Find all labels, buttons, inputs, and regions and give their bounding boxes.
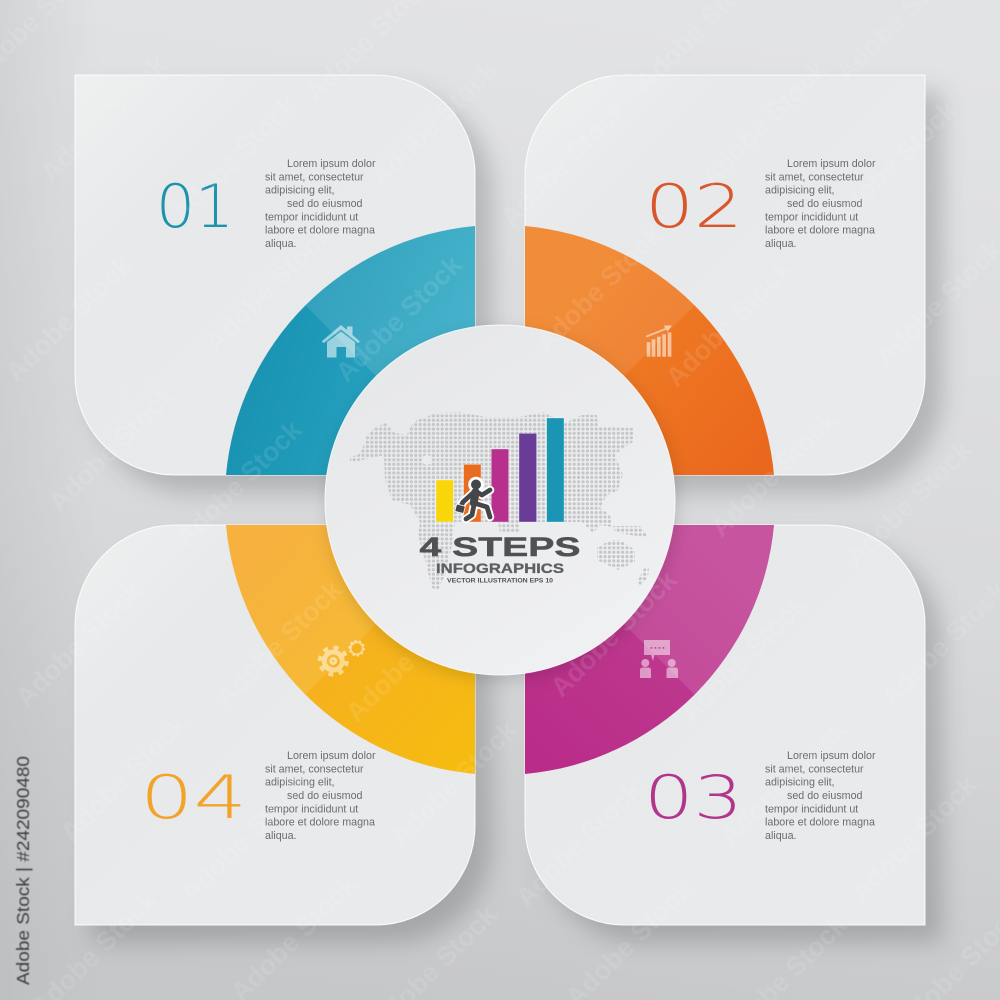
number 02: 02 [645,172,743,242]
watermark: Adobe Stock repeated: Adobe Stock [10,574,148,713]
text block 03: sed do eiusmod [787,790,863,802]
panel: step 01 [75,75,475,475]
icon: rising bar chart [646,326,672,357]
watermark: Adobe Stock repeated: Adobe Stock [330,249,468,388]
watermark: Adobe Stock repeated: Adobe Stock [840,434,978,573]
panel: step 02 [525,75,925,475]
watermark: Adobe Stock repeated: Adobe Stock [705,404,843,543]
icon: home [322,325,360,358]
text block 04: tempor incididunt ut [265,803,358,815]
watermark: Adobe Stock repeated: Adobe Stock [385,714,523,853]
watermark: Adobe Stock repeated: Adobe Stock [0,249,138,388]
text block 03: adipisicing elit, [765,777,835,789]
watermark: Adobe Stock repeated: Adobe Stock [715,714,853,853]
text block 04: sed do eiusmod [287,790,363,802]
watermark: Adobe Stock repeated: Adobe Stock [165,89,303,228]
vertical stock credit: Adobe Stock | #242090480 [13,756,33,985]
arc sheen 02 [525,226,694,475]
text block 02: tempor incididunt ut [765,211,858,223]
icon: people talking [640,640,678,678]
card 01 [75,75,475,475]
arc band 03 [525,525,774,774]
watermark: Adobe Stock repeated: Adobe Stock [495,94,633,233]
watermark: Adobe Stock repeated: Adobe Stock [675,589,813,728]
panel: step 03 [525,525,925,925]
arc band 04 [226,525,475,774]
bar chart [436,418,564,522]
arc sheen 04 [226,525,475,694]
number 04: 04 [140,763,247,833]
title: 4 STEPS: 4 STEPS [420,532,580,562]
text block 04: labore et dolore magna [265,817,375,829]
text block 02: aliqua. [765,238,796,250]
text block 04: aliqua. [265,830,296,842]
watermark: Adobe Stock repeated: Adobe Stock [510,774,648,913]
watermark: Adobe Stock repeated: Adobe Stock [695,54,833,193]
watermark: Adobe Stock repeated: Adobe Stock [660,254,798,393]
watermark: Adobe Stock repeated: Adobe Stock [55,709,193,848]
arc band 01 [226,226,475,475]
icon: running businessman [455,480,490,519]
arc band 02 [525,226,774,475]
circle disc [325,325,675,675]
watermark: Adobe Stock repeated: Adobe Stock [43,379,181,518]
text block 01: labore et dolore magna [265,225,375,237]
watermark: Adobe Stock repeated: Adobe Stock [545,564,683,703]
watermark: Adobe Stock repeated: Adobe Stock [200,219,338,358]
number 03: 03 [644,763,743,833]
text block 01: sed do eiusmod [287,198,363,210]
watermark: Adobe Stock repeated: Adobe Stock [170,414,308,553]
panel: step 04 [75,525,475,925]
text block 01: tempor incididunt ut [265,211,358,223]
text block 03: labore et dolore magna [765,817,875,829]
number 01: 01 [156,172,234,242]
watermark: Adobe Stock repeated: Adobe Stock [210,574,348,713]
text block 03: sit amet, consectetur [765,763,864,775]
dotted world map [345,408,655,593]
text block 04: Lorem ipsum dolor [287,750,376,762]
arc sheen 01 [306,226,475,475]
centre circle [325,325,675,675]
text block 03: tempor incididunt ut [765,803,858,815]
text block 02: sed do eiusmod [787,198,863,210]
icon: gears [320,641,364,674]
text block 03: aliqua. [765,830,796,842]
text block 02: Lorem ipsum dolor [787,158,876,170]
text block 02: adipisicing elit, [765,185,835,197]
card 02 [525,75,925,475]
watermark: Adobe Stock repeated: Adobe Stock [175,769,313,908]
text block 02: sit amet, consectetur [765,171,864,183]
text block 01: sit amet, consectetur [265,171,364,183]
text block 04: adipisicing elit, [265,777,335,789]
text block 02: labore et dolore magna [765,225,875,237]
card 03 [525,525,925,925]
caption: vector illustration: VECTOR ILLUSTRATION EPS 10 [447,578,554,584]
watermark: Adobe Stock repeated: Adobe Stock [365,54,503,193]
watermark: Adobe Stock repeated: Adobe Stock [340,589,478,728]
text block 01: adipisicing elit, [265,185,335,197]
subtitle: INFOGRAPHICS: INFOGRAPHICS [436,560,564,576]
watermark: Adobe Stock repeated: Adobe Stock [35,49,173,188]
text block 01: aliqua. [265,238,296,250]
watermark: Adobe Stock repeated: Adobe Stock [530,219,668,358]
text block 04: sit amet, consectetur [265,763,364,775]
card 04 [75,525,475,925]
watermark: Adobe Stock repeated: Adobe Stock [825,94,963,233]
text block 03: Lorem ipsum dolor [787,750,876,762]
text block 01: Lorem ipsum dolor [287,158,376,170]
watermark: Adobe Stock repeated: Adobe Stock [845,769,983,908]
arc sheen 03 [525,525,774,694]
